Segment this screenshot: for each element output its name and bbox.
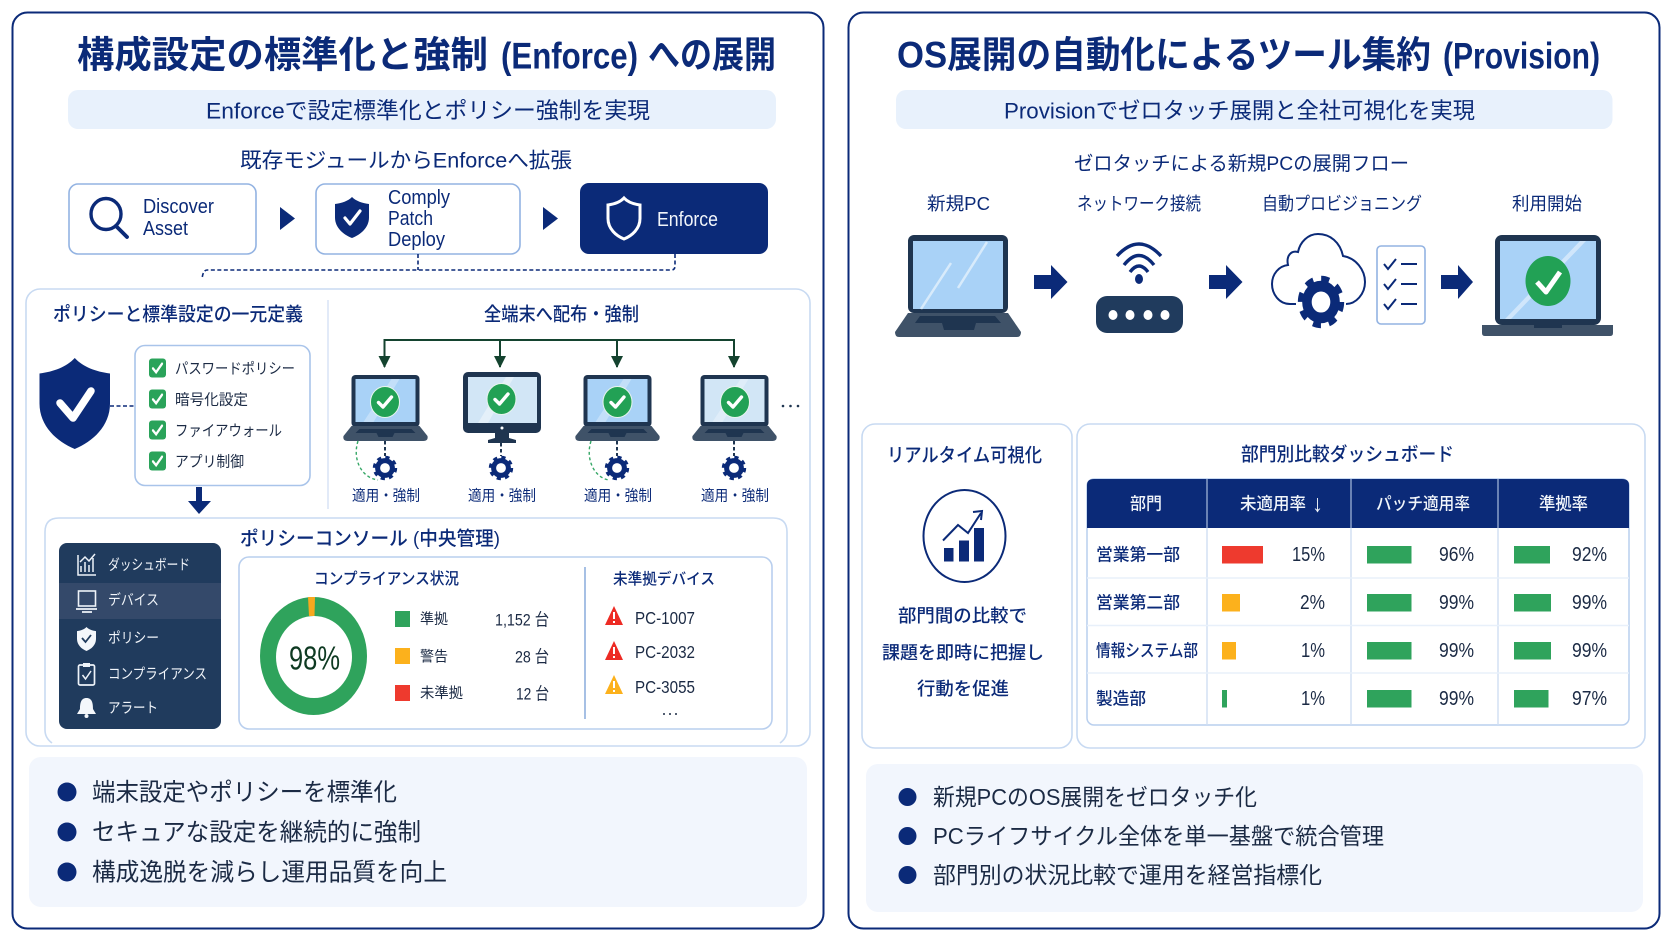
menu: compliance: コンプライアンス <box>108 666 207 683</box>
key points: Provision: 新規PCのOS展開をゼロタッチ化 <box>933 784 1257 810</box>
heading: distribution: 全端末へ配布・強制 <box>484 304 639 326</box>
device: desktop monitor: 適用・強制 <box>468 488 536 504</box>
row: sales 1: 営業第一部 <box>1096 546 1180 564</box>
check: app control: アプリ制御 <box>175 454 244 470</box>
icon: large shield <box>40 358 110 449</box>
menu: alert: アラート <box>108 701 158 717</box>
label: new PC: 新規PC <box>927 194 990 214</box>
key points: Enforce: セキュアな設定を継続的に強制 <box>92 818 421 846</box>
icon: ready laptop <box>1482 235 1613 336</box>
key points: Enforce: 構成逸脱を減らし運用品質を向上 <box>92 858 447 886</box>
icon: shield check <box>335 197 369 238</box>
device: laptop 2: 適用・強制 <box>584 488 652 504</box>
subtitle band: Enforce <box>68 90 776 129</box>
icon: cloud with gear <box>1272 234 1365 324</box>
step: Enforce <box>580 183 768 254</box>
row: IT: 99% <box>1439 640 1474 662</box>
icon: growth chart <box>924 490 1006 582</box>
check: app control <box>149 452 244 470</box>
step: Comply Patch Deploy <box>316 184 520 254</box>
device: laptop 3: 適用・強制 <box>701 488 769 504</box>
title: Provision: OS展開の自動化によるツール集約 <box>897 34 1431 76</box>
arrow: flow 1 <box>1034 265 1068 299</box>
step: Discover Asset: Asset <box>143 218 188 240</box>
row: sales 2 <box>1096 592 1607 614</box>
distribution tree <box>378 340 740 368</box>
text: realtime description: 課題を即時に把握し <box>882 643 1044 663</box>
row: IT: 情報システム部 <box>1096 642 1198 660</box>
table header: 準拠率 <box>1539 494 1588 514</box>
title: Provision: (Provision) <box>1443 36 1600 76</box>
subtitle band: Provision <box>896 90 1612 129</box>
heading: realtime: リアルタイム可視化 <box>887 444 1042 466</box>
key points: Provision: 部門別の状況比較で運用を経営指標化 <box>933 862 1322 888</box>
compliance card <box>239 557 772 729</box>
icon: magnifier <box>91 198 127 237</box>
table header <box>1130 490 1588 518</box>
row: IT: 1% <box>1301 640 1325 662</box>
menu: alert <box>77 698 158 718</box>
non-compliant list: PC-3055 <box>635 677 695 697</box>
key points: Enforce <box>29 757 807 907</box>
ellipsis: more devices <box>782 405 799 407</box>
panel: department dashboard <box>1077 424 1645 748</box>
non-compliant list <box>605 606 695 715</box>
label: network: ネットワーク接続 <box>1077 194 1201 214</box>
dashed connector <box>202 254 675 279</box>
step: Comply Patch Deploy: Deploy <box>388 229 445 251</box>
menu: devices: デバイス <box>108 591 159 609</box>
step: Enforce: Enforce <box>657 209 718 231</box>
row: sales 1: 15% <box>1292 544 1325 566</box>
table header: パッチ適用率 <box>1376 494 1470 514</box>
panel: realtime visibility <box>862 424 1072 748</box>
icon: new laptop <box>895 235 1021 337</box>
text: realtime description: 部門間の比較で <box>898 606 1027 626</box>
panel: Enforce <box>12 12 824 928</box>
row: IT: 99% <box>1572 640 1607 662</box>
device: desktop monitor <box>463 372 541 504</box>
non-compliant list: PC-1007 <box>635 608 695 628</box>
key points: Provision <box>866 764 1643 912</box>
table header: 部門 <box>1130 494 1162 514</box>
sidebar menu <box>59 543 221 729</box>
icon: wifi router <box>1096 244 1183 333</box>
table header: 未適用率 <box>1240 494 1306 514</box>
arrow: step 1 to 2 <box>280 207 295 230</box>
heading: module extension: 既存モジュールからEnforceへ拡張 <box>240 150 572 172</box>
non-compliant list: PC-2032 <box>635 642 695 662</box>
key points: Provision: PCライフサイクル全体を単一基盤で統合管理 <box>933 823 1384 849</box>
title: Enforce <box>77 34 776 76</box>
row: manufacturing: 1% <box>1301 688 1325 710</box>
step: Comply Patch Deploy: Comply <box>388 187 450 209</box>
arrow: step 2 to 3 <box>543 207 558 230</box>
heading: central definition: ポリシーと標準設定の一元定義 <box>53 304 303 326</box>
label: start use: 利用開始 <box>1512 194 1582 214</box>
legend: 28 台 <box>515 648 549 666</box>
row: manufacturing: 製造部 <box>1096 690 1146 708</box>
row: sales 1: 96% <box>1439 544 1474 566</box>
panel: policy definition and distribution <box>26 289 810 746</box>
donut chart <box>260 597 367 715</box>
row: sales 2: 99% <box>1572 592 1607 614</box>
arrow: flow 2 <box>1209 265 1242 299</box>
row: manufacturing: 97% <box>1572 688 1607 710</box>
device: laptop 1 <box>343 375 428 504</box>
legend: 12 台 <box>516 684 549 704</box>
subtitle band: Provision: Provisionでゼロタッチ展開と全社可視化を実現 <box>1004 98 1475 124</box>
menu: dashboard: ダッシュボード <box>108 557 190 574</box>
row: sales 1 <box>1096 544 1607 566</box>
heading: compliance: コンプライアンス状況 <box>314 570 459 588</box>
subtitle band: Enforce: Enforceで設定標準化とポリシー強制を実現 <box>206 98 650 124</box>
title: Enforce: 構成設定の標準化と強制 <box>77 34 488 76</box>
policy checklist <box>135 346 310 486</box>
check: encryption <box>149 390 248 408</box>
check: password: パスワードポリシー <box>175 360 295 378</box>
arrow: flow 3 <box>1441 265 1473 299</box>
icon: shield outline <box>608 198 640 239</box>
table <box>1087 479 1629 725</box>
text: realtime description: 行動を促進 <box>917 679 1009 699</box>
check: password <box>149 358 295 378</box>
row: sales 2: 2% <box>1300 592 1325 614</box>
heading: zero-touch flow: ゼロタッチによる新規PCの展開フロー <box>1074 153 1409 175</box>
legend: 警告 <box>420 648 448 666</box>
device: laptop 2 <box>575 375 660 504</box>
row: IT <box>1096 640 1607 662</box>
text: realtime description <box>882 606 1044 699</box>
step: Comply Patch Deploy: Patch <box>388 208 433 230</box>
arrow: down to console <box>188 487 211 514</box>
label: provisioning: 自動プロビジョニング <box>1262 194 1422 214</box>
check: firewall: ファイアウォール <box>175 422 282 440</box>
check: encryption: 暗号化設定 <box>175 392 248 408</box>
menu: policy: ポリシー <box>108 630 159 647</box>
heading: dashboard: 部門別比較ダッシュボード <box>1241 444 1454 466</box>
row: manufacturing: 99% <box>1439 688 1474 710</box>
step: Discover Asset <box>69 184 256 254</box>
device: laptop 1: 適用・強制 <box>352 488 420 504</box>
step: Discover Asset: Discover <box>143 196 214 218</box>
row: sales 1: 92% <box>1572 544 1607 566</box>
panel: Provision <box>848 12 1660 928</box>
menu: dashboard <box>78 554 190 575</box>
row: sales 2: 営業第二部 <box>1096 594 1180 612</box>
legend <box>395 610 549 704</box>
legend: 1,152 台 <box>495 610 549 630</box>
device: laptop 3 <box>692 375 777 504</box>
heading: policy console: ポリシーコンソール (中央管理) <box>240 528 500 550</box>
table header: ↓ <box>1312 490 1323 518</box>
heading: non-compliant devices: 未準拠デバイス <box>613 569 715 588</box>
row: manufacturing <box>1096 688 1607 710</box>
menu: compliance <box>78 663 207 685</box>
row: sales 2: 99% <box>1439 592 1474 614</box>
title: Enforce: への展開 <box>648 34 776 76</box>
title: Enforce: (Enforce) <box>501 36 638 76</box>
menu: devices <box>76 591 159 612</box>
menu: policy <box>77 627 159 651</box>
legend: 準拠 <box>420 611 448 628</box>
donut chart: 98% <box>289 640 340 676</box>
key points: Enforce: 端末設定やポリシーを標準化 <box>92 778 397 806</box>
check: firewall <box>149 420 282 440</box>
panel: policy console <box>45 518 787 743</box>
icon: provisioning checklist <box>1377 246 1425 324</box>
legend: 未準拠 <box>420 685 463 702</box>
